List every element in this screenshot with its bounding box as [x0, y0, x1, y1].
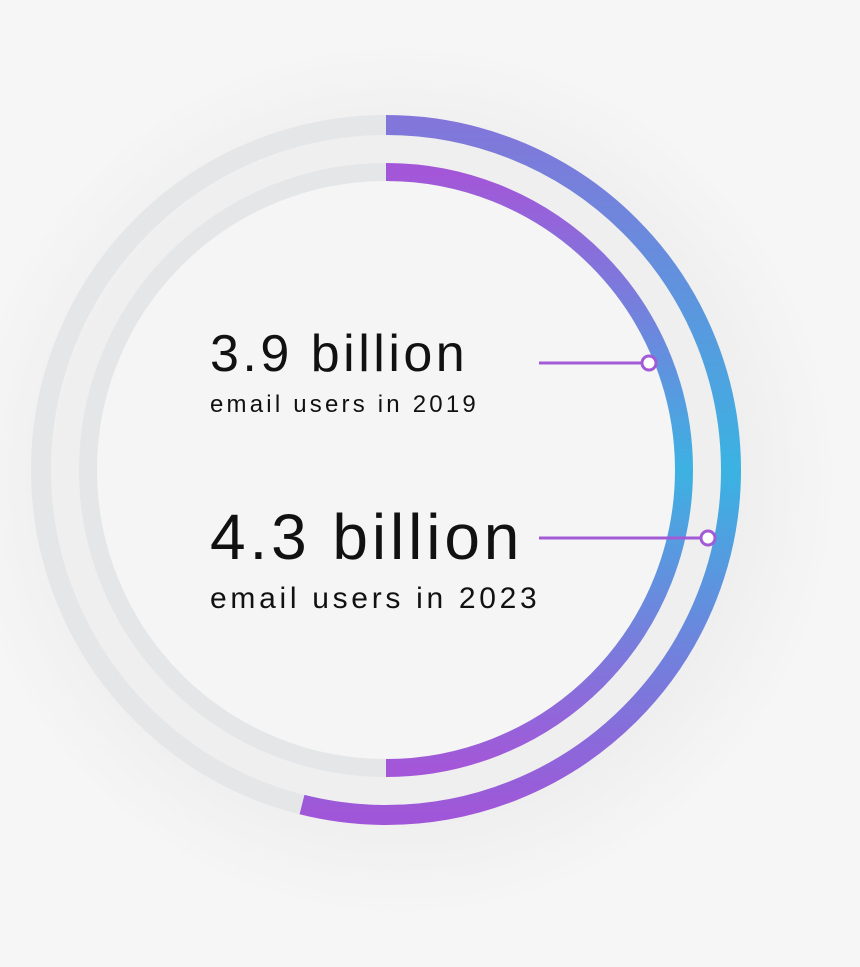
inner ring: 2019 arc	[386, 172, 684, 768]
outer ring: 2023 arc	[302, 125, 731, 815]
stat 2019	[210, 325, 479, 418]
stat 2019: 3.9 billion	[210, 325, 468, 383]
connector 2019	[539, 356, 656, 370]
connector 2023	[539, 531, 715, 545]
stat 2019: email users in 2019	[210, 391, 479, 418]
stat 2023: 4.3 billion	[210, 501, 523, 573]
outer ring track	[41, 125, 731, 815]
stat 2023	[210, 501, 540, 615]
stat 2023: email users in 2023	[210, 582, 540, 615]
inner ring track	[88, 172, 684, 768]
